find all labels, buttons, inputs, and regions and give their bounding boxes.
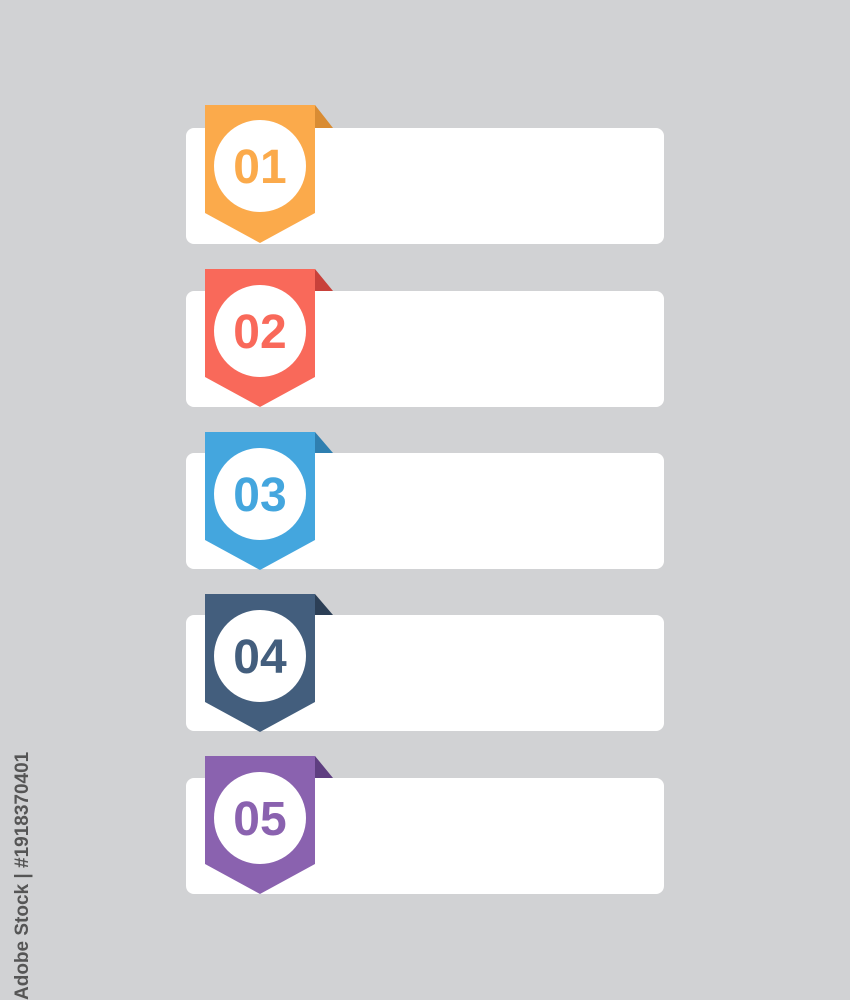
- card 5: [186, 778, 664, 894]
- badge 5: [205, 756, 333, 894]
- badge 3: 03: [233, 469, 287, 522]
- row 4: [186, 594, 664, 732]
- card 3: [186, 453, 664, 569]
- row 1: [186, 105, 664, 244]
- badge 4: 04: [233, 631, 287, 684]
- badge 4: [205, 594, 333, 732]
- row 3: [186, 432, 664, 570]
- watermark id text: Adobe Stock | #1918370401: [12, 751, 33, 1000]
- badge 1: 01: [233, 141, 287, 194]
- badge 2: 02: [233, 306, 287, 359]
- card 2: [186, 291, 664, 407]
- badge 5: 05: [233, 793, 287, 846]
- badge 1: [205, 105, 333, 243]
- card 4: [186, 615, 664, 731]
- row 5: [186, 756, 664, 894]
- badge 3: [205, 432, 333, 570]
- card 1: [186, 128, 664, 244]
- badge 2: [205, 269, 333, 407]
- row 2: [186, 269, 664, 407]
